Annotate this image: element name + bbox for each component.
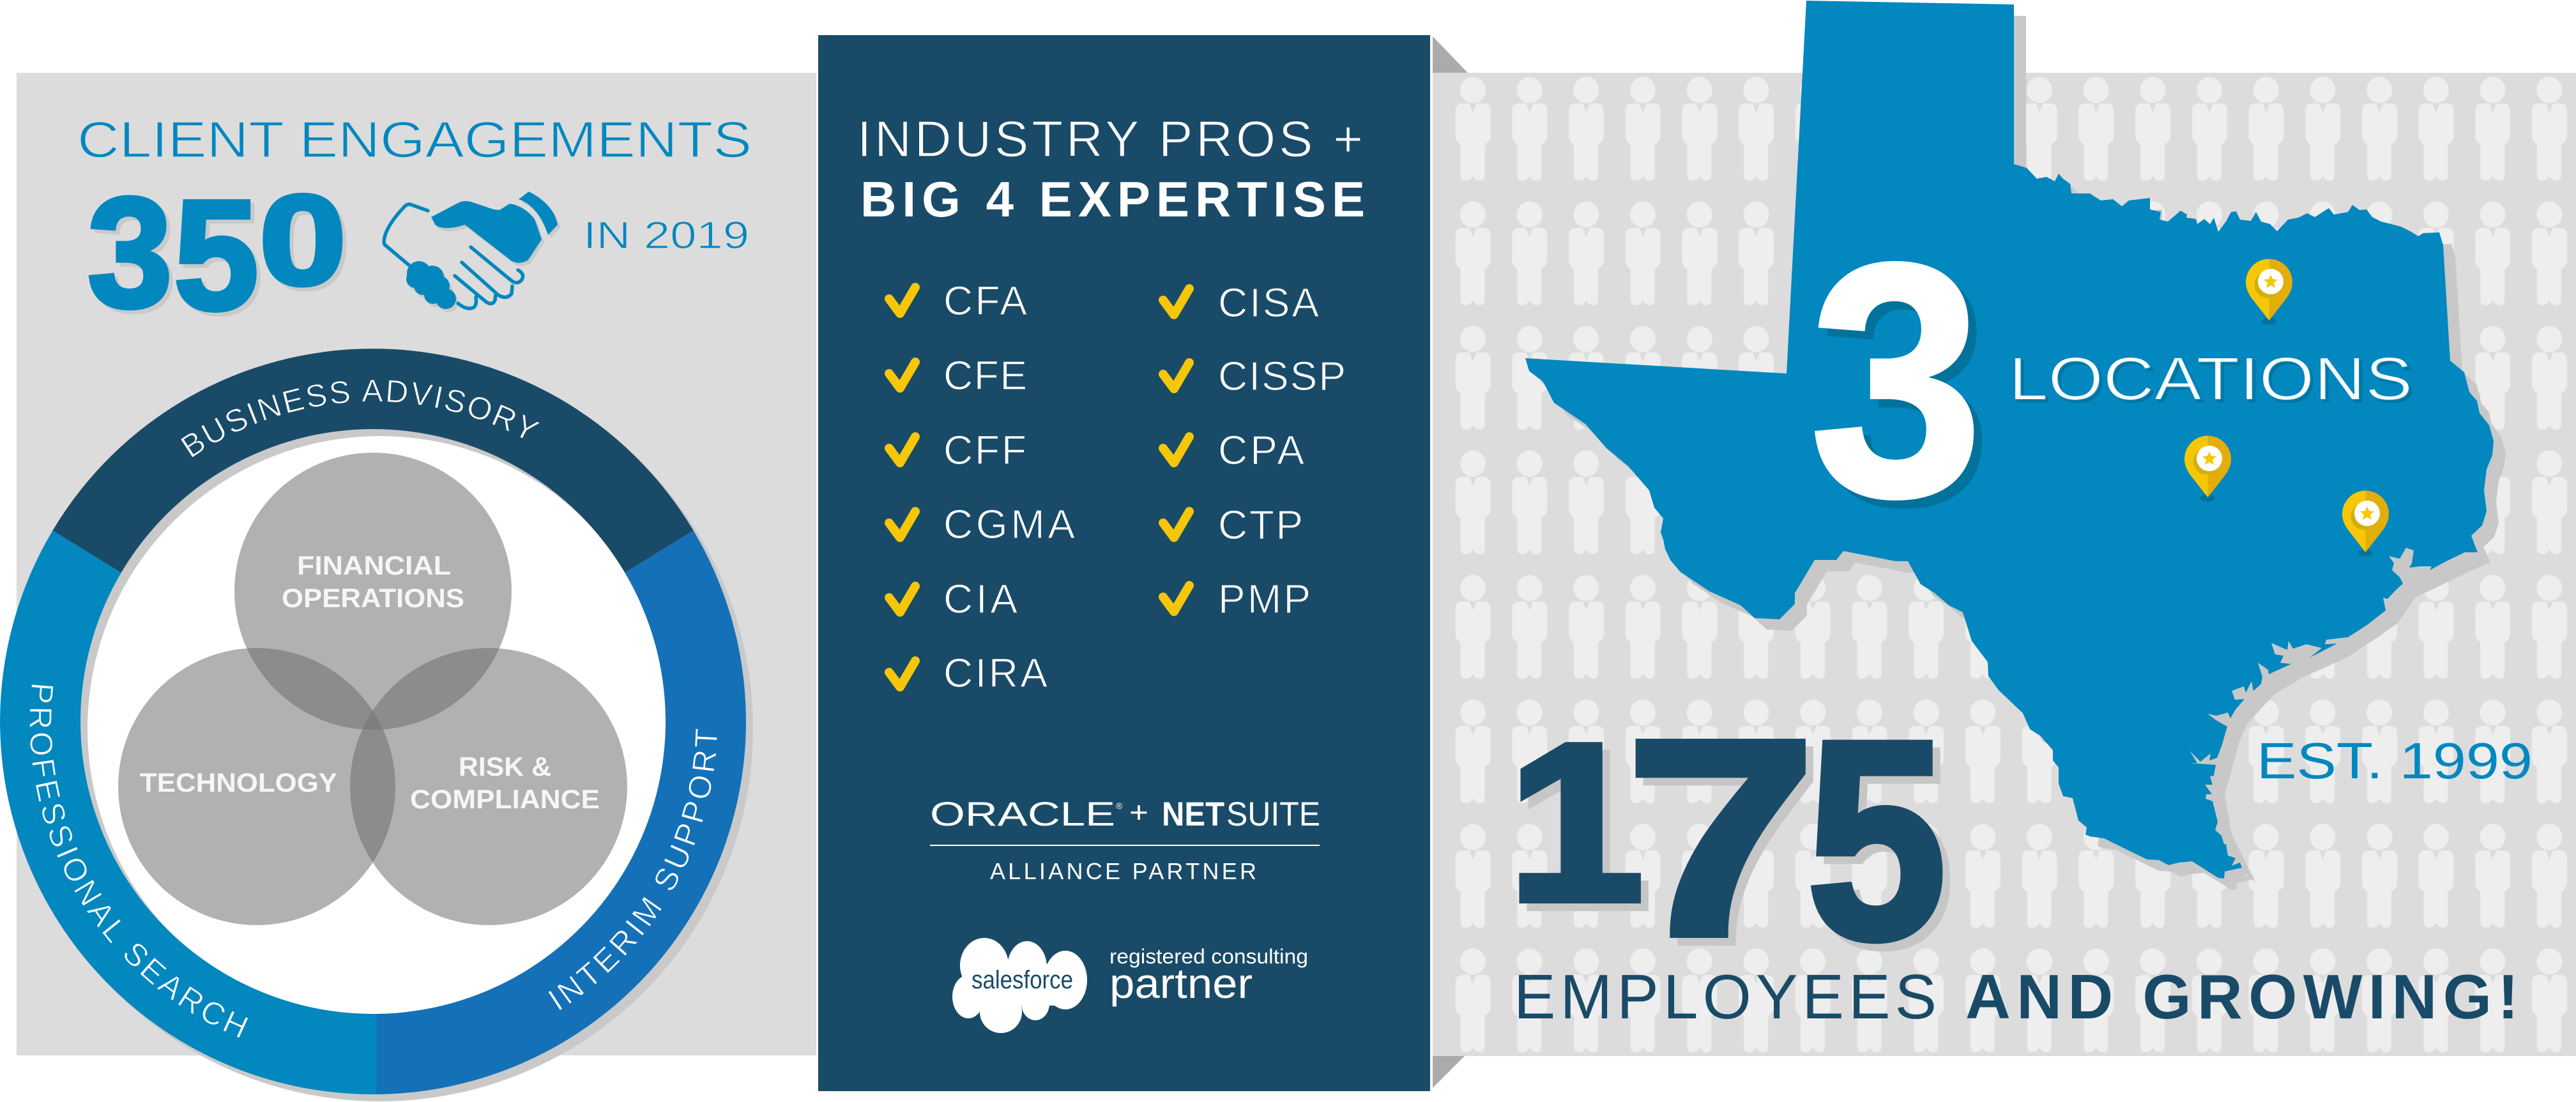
number: 175: 7 bbox=[1626, 683, 1816, 993]
list: certifications column one: CFA bbox=[943, 278, 1027, 324]
number: 350 bbox=[88, 165, 350, 346]
panel: industry pros and certifications bbox=[817, 34, 1431, 1092]
text: in 2019: IN 2019 bbox=[583, 214, 749, 257]
heading: big 4 expertise: BIG 4 EXPERTISE bbox=[860, 171, 1365, 227]
number: 3: 3 bbox=[1818, 203, 1992, 574]
list: certifications column two: CTP bbox=[1218, 502, 1303, 548]
list: certifications column one: CFE bbox=[943, 352, 1027, 398]
list: certifications column one: CIRA bbox=[943, 650, 1048, 696]
list: certifications column one: CIA bbox=[943, 576, 1017, 622]
label: professional search: PROFESSIONAL SEARCH bbox=[29, 684, 248, 1038]
diagram: service ring and venn bbox=[0, 349, 753, 1101]
label: business advisory: BUSINESS ADVISORY bbox=[181, 380, 539, 457]
number: 350: 5 bbox=[174, 167, 259, 342]
logo: oracle netsuite: NET bbox=[1162, 796, 1224, 833]
list: certifications column two: CISSP bbox=[1218, 353, 1346, 399]
venn label: technology: TECHNOLOGY bbox=[140, 767, 337, 797]
fold: bottom corner bbox=[1433, 1056, 1465, 1088]
fold: top corner bbox=[1433, 36, 1468, 73]
venn label: risk and compliance: RISK & bbox=[459, 751, 551, 781]
number: 175: 1 bbox=[1516, 706, 1651, 955]
label: interim support: INTERIM SUPPORT bbox=[548, 729, 717, 1010]
ring segment: professional search bbox=[0, 531, 376, 1094]
logo: oracle netsuite: ® bbox=[1116, 801, 1123, 811]
logo: oracle netsuite: SUITE bbox=[1226, 796, 1320, 833]
icon: location pin central bbox=[2184, 435, 2231, 502]
logo: salesforce partner bbox=[952, 938, 1308, 1033]
text: established 1999: EST. 1999 bbox=[2257, 732, 2533, 789]
number: 350: 0 bbox=[259, 169, 346, 312]
text: locations: LOCATIONS bbox=[2011, 347, 2415, 416]
icon: handshake bbox=[384, 192, 560, 312]
venn label: risk and compliance bbox=[410, 751, 600, 814]
logo: oracle netsuite bbox=[930, 796, 1320, 884]
panel: employees background with people pattern bbox=[1433, 73, 2576, 1056]
venn label: financial operations: OPERATIONS bbox=[282, 583, 464, 613]
map: texas with shadow bbox=[1525, 1, 2506, 890]
text: employees and growing bbox=[1514, 962, 2519, 1032]
venn circles bbox=[118, 453, 627, 925]
venn label: risk and compliance: COMPLIANCE bbox=[410, 784, 600, 814]
number: 175: 5 bbox=[1815, 691, 1954, 1005]
list: certifications column one bbox=[943, 278, 1075, 696]
number: 350: 5 bbox=[178, 171, 263, 346]
ring segment: business advisory bbox=[52, 349, 694, 573]
icon: location pin north bbox=[2246, 259, 2292, 324]
list: certifications column two: CISA bbox=[1218, 280, 1319, 326]
number: 175: 1 bbox=[1508, 698, 1643, 947]
number: 175: 5 bbox=[1807, 683, 1946, 997]
venn label: financial operations: FINANCIAL bbox=[297, 550, 451, 580]
heading: industry pros: INDUSTRY PROS + bbox=[857, 110, 1363, 167]
text: employees and growing: AND GROWING! bbox=[1965, 962, 2519, 1032]
number: 175: 7 bbox=[1633, 690, 1824, 1001]
list: certifications column one: CGMA bbox=[943, 501, 1075, 547]
list: certifications column one: CFF bbox=[943, 427, 1026, 473]
logo: oracle netsuite: ALLIANCE PARTNER bbox=[990, 858, 1256, 884]
icons: check marks bbox=[889, 287, 1189, 687]
venn label: financial operations bbox=[282, 550, 464, 613]
icon: location pin southeast bbox=[2342, 490, 2389, 557]
list: certifications column two: PMP bbox=[1218, 576, 1311, 622]
logo: salesforce partner: partner bbox=[1109, 960, 1253, 1007]
list: certifications column two: CPA bbox=[1218, 427, 1304, 473]
text: employees and growing: EMPLOYEES bbox=[1514, 962, 1937, 1032]
ring shadow bbox=[7, 356, 753, 1101]
logo: salesforce partner: registered consulting bbox=[1109, 945, 1308, 968]
ring segment: interim support bbox=[376, 531, 746, 1094]
text: locations: LOCATIONS bbox=[2009, 345, 2412, 413]
logo: oracle netsuite: ORACLE bbox=[930, 796, 1115, 833]
number: 350: 3 bbox=[91, 169, 176, 343]
number: 3: 3 bbox=[1810, 195, 1983, 566]
list: certifications column two bbox=[1218, 280, 1346, 622]
logo: oracle netsuite: + bbox=[1129, 796, 1148, 829]
logo: salesforce partner: salesforce bbox=[972, 966, 1073, 994]
number: 175 bbox=[1508, 683, 1954, 1005]
number: 350: 3 bbox=[88, 165, 172, 340]
heading: client engagements: CLIENT ENGAGEMENTS bbox=[77, 111, 752, 168]
number: 350: 0 bbox=[263, 173, 350, 315]
panel: client engagements background bbox=[17, 73, 816, 1055]
